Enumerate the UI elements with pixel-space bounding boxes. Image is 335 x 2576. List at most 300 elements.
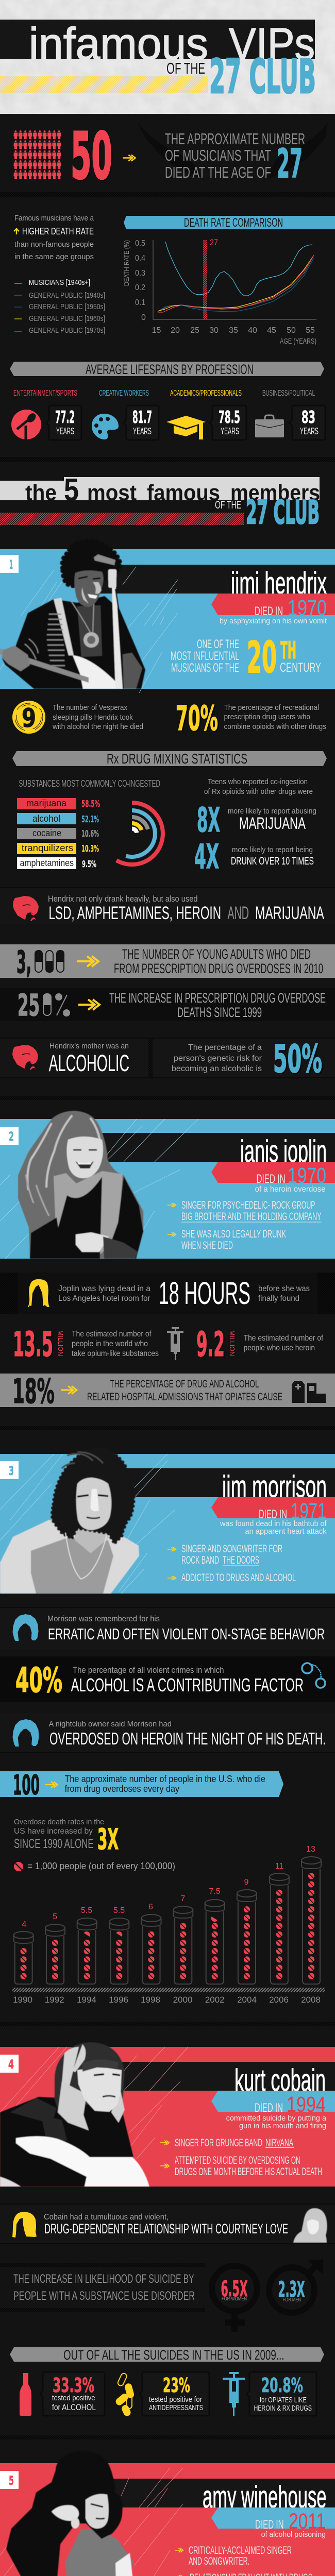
value: antidepressants (140, 2372, 209, 2416)
value labels: 9 (244, 1878, 249, 1887)
value labels: 5.5 (113, 1906, 125, 1915)
joplin eighteen hours panel: 18 HOURS (159, 1276, 250, 1311)
x axis labels: 25 (190, 326, 199, 335)
description (165, 130, 305, 181)
opium and heroin users: The estimated number of (244, 1334, 323, 1343)
photo: jim morrison (0, 1449, 139, 1594)
x axis labels: 55 (306, 326, 315, 335)
substance use disorder stat: THE INCREASE IN LIKELIHOOD OF SUICIDE BY (13, 2272, 194, 2286)
photo: courtney love (293, 2208, 327, 2243)
substance use disorder stat: 6.5X (221, 2276, 247, 2301)
cause of death: by asphyxiating on his own vomit (220, 617, 327, 625)
value: opiates: 20.8% (261, 2374, 303, 2397)
heading words: the (25, 480, 57, 505)
hendrix drug use band (0, 887, 335, 924)
substances bars: 52.1% (81, 814, 99, 825)
hendrix mother panel (0, 1037, 335, 1081)
divider (0, 457, 335, 462)
substances bars: 10.3% (81, 843, 99, 854)
yellow hatch bar (0, 76, 208, 93)
higher death rate note: HIGHER DEATH RATE (22, 226, 94, 236)
overdose increase band: 25 (18, 988, 40, 1023)
year labels: 1992 (45, 1995, 64, 2005)
hendrix mother panel: becoming an alcoholic is (172, 1064, 262, 1073)
higher death rate note: Famous musicians have a (14, 214, 94, 223)
chart legend: GENERAL PUBLIC [1960s] (29, 314, 105, 323)
value: alcohol: tested positive (52, 2394, 95, 2402)
cause of death: of alcohol poisoning (261, 2530, 326, 2539)
y axis labels: 0 (141, 313, 146, 322)
value: men: FOR MEN (282, 2297, 301, 2303)
heading words: famous (147, 480, 220, 505)
50 musicians stat: 50 (71, 119, 112, 194)
arrow (61, 1386, 77, 1394)
category labels (13, 389, 315, 398)
rank badge: 2 (9, 1129, 14, 1144)
title: infamous VIPs (29, 19, 315, 69)
x axis labels: 45 (267, 326, 276, 335)
hospital admissions band: THE PERCENTAGE OF DRUG AND ALCOHOL (110, 1378, 259, 1390)
wings watermark (138, 123, 328, 179)
bottle 1990 (14, 1931, 34, 1984)
arrow (45, 1782, 58, 1788)
x axis labels: 30 (209, 326, 219, 335)
icon: joplin hair (28, 1279, 49, 1307)
divider (0, 1096, 335, 1100)
white torn band (0, 477, 320, 500)
year labels: 1996 (109, 1995, 128, 2005)
icon: cobain hair (12, 2212, 37, 2238)
violent crimes band: The percentage of all violent crimes in which (73, 1665, 224, 1675)
category labels: ENTERTAINMENT/SPORTS (13, 389, 77, 398)
substances bars: alcohol (32, 814, 60, 824)
bar chart: pill bottles (12, 1845, 325, 2005)
chart legend: GENERAL PUBLIC [1970s] (29, 326, 105, 335)
title: infamous VIPs: VIPs (229, 19, 315, 69)
icon: hospital (292, 1381, 326, 1403)
icon: morrison hair (12, 1614, 38, 1643)
divider (0, 192, 335, 197)
line chart: death rate by age: 27 (210, 238, 218, 247)
teens co-ingestion stats: more likely to report being (232, 845, 313, 854)
bullets: WHEN SHE DIED (181, 1240, 233, 1251)
bottle 1998 (141, 1914, 161, 1984)
death year tab: DIED IN (255, 2101, 283, 2115)
divider (0, 2308, 205, 2312)
cobain relationship panel: Cobain had a tumultuous and violent, (44, 2213, 169, 2222)
panel: kurt cobain (0, 2042, 335, 2187)
x axis labels (152, 326, 315, 335)
icon: up arrow (14, 229, 19, 234)
hendrix drug use band: LSD, AMPHETAMINES, HEROIN (48, 903, 221, 923)
value labels: 13 (306, 1845, 315, 1854)
violent crimes band: 40% (15, 1660, 62, 1700)
value: business: 83 (301, 407, 315, 427)
stat: 70 percent: The percentage of recreational (224, 703, 319, 712)
diagonal lines (0, 567, 178, 693)
death year tab (211, 1162, 335, 1188)
morrison overdose panel: A nightclub owner said Morrison had (48, 1720, 172, 1728)
bullets (175, 2545, 314, 2576)
value: alcohol (40, 2372, 105, 2416)
value: antidepressants: tested positive for (149, 2395, 202, 2404)
cause of death: committed suicide by putting a (226, 2114, 327, 2123)
bottle 2006 (270, 1873, 289, 1984)
description: The number of Vesperax (53, 703, 127, 712)
lifespans row (11, 389, 325, 440)
stat: 70 percent: prescription drug users who (224, 713, 310, 721)
icon: capsule percent (43, 994, 70, 1016)
substance use disorder stat (13, 2259, 323, 2332)
value: women (221, 2276, 247, 2302)
diagonal lines (0, 2047, 188, 2159)
pill chart legend: = 1,000 people (out of every 100,000) (27, 1861, 175, 1871)
bottle 1996 (109, 1918, 129, 1984)
icon: hendrix head (12, 1045, 38, 1070)
stat: nine vesperax (12, 701, 143, 734)
20th century: 20 (247, 632, 277, 683)
value: antidepressants: 23% (163, 2374, 190, 2397)
panel: janis joplin (0, 1111, 335, 1259)
value: creative: 81.7 (132, 407, 152, 427)
line chart: death rate by age (122, 238, 316, 346)
y axis labels (135, 239, 146, 322)
death year tab (211, 2507, 335, 2534)
stat: 70 percent: combine opioids with other drugs (224, 722, 326, 731)
death year tab: 2011 (289, 2509, 326, 2534)
photo: kurt cobain (0, 2042, 149, 2187)
value: alcohol: 33.3% (53, 2374, 94, 2397)
joplin eighteen hours panel (0, 1273, 335, 1314)
black name band (98, 565, 335, 594)
y axis labels: 0.5 (135, 239, 145, 248)
red hatch bar (0, 513, 244, 525)
teens co-ingestion stats: 4X (194, 838, 219, 876)
bottle 2008 (301, 1857, 321, 1984)
curves (158, 242, 314, 312)
value: alcohol: for ALCOHOL (52, 2402, 96, 2412)
rank badge (0, 555, 19, 573)
bullets (167, 1199, 322, 1251)
heading words: 5 (64, 472, 79, 508)
divider (0, 2435, 335, 2439)
category labels: ACADEMICS/PROFESSIONALS (170, 389, 242, 398)
heading words (25, 472, 320, 508)
value: entertainment (46, 405, 81, 440)
x axis title: AGE (YEARS) (280, 337, 316, 346)
suicide stats row (20, 2372, 316, 2417)
rank badge (0, 1127, 19, 1145)
chart legend: MUSICIANS [1940s+] (29, 278, 90, 287)
substances bars: cocaine (32, 828, 61, 838)
value labels: 6 (148, 1903, 153, 1911)
hospital admissions band (0, 1372, 335, 1411)
photo: amy winehouse (6, 2451, 136, 2576)
rank badge: 1 (9, 557, 13, 572)
y axis title: DEATH RATE (%) (122, 240, 130, 286)
stat: 70 percent: 70% (176, 699, 218, 738)
description: with alcohol the night he died (52, 722, 143, 731)
divider (0, 2022, 335, 2026)
cause of death: an apparent heart attack (245, 1527, 327, 1536)
hendrix drug use band: Hendrix not only drank heavily, but also used (48, 894, 198, 904)
y axis labels: 0.4 (135, 254, 145, 263)
diagonal lines (0, 1454, 175, 1594)
bottle 2004 (237, 1890, 257, 1984)
of the: OF THE (215, 499, 241, 511)
description: sleeping pills Hendrix took (53, 713, 133, 722)
arrow (123, 155, 136, 161)
people pictogram grid (13, 130, 62, 180)
teens co-ingestion stats: more likely to report abusing (228, 807, 316, 816)
icon: palette (92, 414, 119, 439)
description: DIED AT THE AGE OF (165, 163, 271, 181)
cause of death: gun in his mouth and firing (239, 2122, 326, 2130)
value: antidepressants: ANTIDEPRESSANTS (149, 2403, 203, 2412)
100 per day banner: The approximate number of people in the U.S. who die (65, 1774, 265, 1784)
27 marker (203, 240, 207, 319)
value: men (278, 2277, 305, 2303)
icon: briefcase (255, 415, 284, 437)
young adults overdose band: 3, (16, 944, 31, 980)
teens co-ingestion stats: of Rx opioids with other drugs were (204, 787, 313, 796)
value labels: 5 (53, 1912, 57, 1921)
opium and heroin users: The estimated number of (72, 1330, 152, 1338)
stat: 70 percent (176, 699, 326, 738)
joplin eighteen hours panel: before she was (258, 1284, 310, 1293)
morrison overdose panel (0, 1713, 335, 1753)
substances bars: 10.6% (81, 828, 99, 839)
value: opiates: HEROIN & RX DRUGS (254, 2404, 312, 2413)
violent crimes band (0, 1656, 335, 1702)
x axis labels: 50 (287, 326, 296, 335)
hendrix mother panel: ALCOHOLIC (48, 1050, 129, 1076)
cobain relationship panel (0, 2204, 335, 2244)
value: academics (210, 405, 246, 440)
x axis labels: 20 (171, 326, 180, 335)
substances bars: marijuana (26, 798, 67, 808)
death year tab (211, 2091, 335, 2117)
hendrix mother panel: Hendrix's mother was an (49, 1042, 129, 1050)
opium and heroin users: take opium-like substances (72, 1349, 159, 1358)
death year tab: 1994 (287, 2092, 326, 2117)
value labels: 7.5 (209, 1887, 221, 1896)
year labels (13, 1995, 321, 2005)
year labels: 1990 (13, 1995, 32, 2005)
influence text: MOST INFLUENTIAL (171, 649, 239, 663)
50 musicians stat: 27 (277, 141, 303, 187)
heading words: most (87, 480, 137, 505)
opium and heroin users: MILLION (57, 1330, 64, 1356)
rx drug mixing banner: Rx DRUG MIXING STATISTICS (107, 751, 247, 767)
panel: jimi hendrix (0, 541, 335, 693)
hospital admissions band: 18% (12, 1372, 55, 1411)
icon: number nine badge (12, 701, 45, 734)
bottle 2000 (173, 1906, 193, 1984)
diagonal lines (0, 2468, 183, 2576)
bullets: NIRVANA (265, 2137, 293, 2149)
rank badge: 5 (9, 2473, 14, 2488)
rank badge (0, 2471, 19, 2489)
value: academics: 78.5 (219, 407, 240, 427)
overdose rate statement: 3X (97, 1823, 119, 1856)
influence text (171, 637, 239, 675)
substances bars: amphetamines (20, 858, 74, 868)
100 per day banner (0, 1770, 283, 1801)
teens co-ingestion stats: Teens who reported co-ingestion (208, 777, 308, 786)
overdose increase band: DEATHS SINCE 1999 (177, 1005, 262, 1020)
rank badge (0, 2055, 19, 2073)
diagonal lines (0, 1119, 198, 1259)
death year tab: DIED IN (255, 2518, 284, 2532)
morrison behavior panel: Morrison was remembered for his (47, 1615, 160, 1623)
panel: jim morrison (0, 1449, 335, 1594)
chart legend: GENERAL PUBLIC [1950s] (29, 302, 105, 311)
year labels: 1994 (77, 1995, 96, 2005)
50 musicians stat (13, 119, 328, 194)
opium and heroin users: 13.5 (13, 1325, 53, 1364)
value: opiates (247, 2372, 316, 2416)
value: creative (124, 405, 159, 440)
arrow (77, 956, 98, 967)
y axis labels: 0.1 (135, 298, 145, 307)
y axis labels: 0.3 (135, 269, 145, 278)
value: business (290, 405, 325, 440)
young adults overdose band (0, 944, 335, 980)
bottle 2002 (205, 1900, 225, 1984)
radial chart (116, 803, 163, 865)
higher death rate note: than non-famous people (14, 240, 94, 249)
value: business: YEARS (300, 426, 319, 436)
icons: capsule zeros (35, 951, 64, 972)
influence text: MUSICIANS OF THE (171, 661, 239, 675)
y axis labels: 0.2 (135, 283, 145, 292)
bullets (167, 1543, 296, 1584)
opium and heroin users: people in the world who (72, 1340, 148, 1348)
bullets: AND SONGWRITER. (189, 2555, 249, 2567)
subtitle: of the: OF THE (166, 59, 205, 77)
panel: amy winehouse (0, 2451, 335, 2576)
icon: handcuffs (302, 1663, 325, 1688)
bullets (160, 2137, 322, 2178)
black name band (113, 1468, 335, 1497)
joplin eighteen hours panel: Los Angeles hotel room for (58, 1294, 150, 1303)
section heading: five most famous members (0, 472, 320, 531)
joplin eighteen hours panel: Joplin was lying dead in a (58, 1284, 150, 1293)
value labels: 5.5 (81, 1906, 92, 1915)
icon: syringe (167, 1327, 183, 1360)
higher death rate note (14, 214, 94, 261)
death year tab (211, 594, 335, 620)
value: academics: YEARS (221, 426, 239, 436)
rank badge (0, 1461, 19, 1479)
opium and heroin users: MILLION (228, 1330, 236, 1356)
black name band (119, 2062, 335, 2091)
cause of death (220, 1519, 327, 1536)
chart legend (14, 278, 105, 335)
hendrix mother panel: person's genetic risk for (174, 1054, 262, 1063)
death year tab: DIED IN (259, 1507, 287, 1521)
value labels: 11 (275, 1862, 283, 1871)
opium and heroin users (13, 1325, 323, 1364)
bottle 1994 (77, 1918, 97, 1984)
title header (0, 0, 335, 114)
substances bars (17, 798, 100, 870)
overdose rate statement: Overdose death rates in the (14, 1818, 104, 1826)
20th century: TH (280, 636, 296, 664)
cause of death: was found dead in his bathtub of (220, 1519, 327, 1528)
description (52, 703, 143, 731)
opium and heroin users: 9.2 (196, 1325, 225, 1364)
death year tab (211, 1497, 335, 1523)
icon: syringe (223, 2372, 245, 2416)
value: women: FOR WOMEN (222, 2296, 247, 2302)
cause of death (226, 2114, 327, 2130)
value labels: 4 (22, 1920, 26, 1929)
icon: graduation cap (166, 416, 206, 439)
icon: morrison hair (13, 1719, 39, 1749)
value: entertainment: 77.2 (55, 407, 75, 427)
rank badge: 4 (8, 2057, 14, 2072)
bullets: SINGER FOR GRUNGE BAND (175, 2137, 262, 2149)
teens co-ingestion stats: MARIJUANA (239, 814, 306, 833)
icon: microphone (11, 410, 41, 439)
photo: jimi hendrix (0, 541, 145, 689)
year labels: 2006 (269, 1995, 289, 2005)
opium and heroin users: people who use heroin (244, 1344, 315, 1352)
photo: janis joplin (18, 1111, 143, 1259)
value labels: 7 (181, 1894, 186, 1903)
divider (0, 1426, 335, 1430)
joplin eighteen hours panel: finally found (258, 1294, 299, 1303)
arrow (78, 999, 99, 1010)
year labels: 1998 (141, 1995, 160, 2005)
teens co-ingestion stats: 8X (197, 801, 220, 840)
title band (0, 20, 315, 59)
substances bars: 9.5% (82, 859, 96, 870)
substances bars: tranquilizers (22, 843, 73, 853)
ground hatch (12, 1988, 325, 1992)
heading words: members (230, 480, 320, 505)
rank badge: 3 (9, 1464, 14, 1478)
substance use disorder stat: 2.3X (278, 2277, 305, 2302)
value: opiates: for OPIATES LIKE (260, 2396, 307, 2404)
death year tab: DIED IN (255, 604, 283, 618)
cause of death: of a heroin overdose (255, 1185, 326, 1194)
category labels: CREATIVE WORKERS (99, 389, 149, 398)
substance use disorder stat: PEOPLE WITH A SUBSTANCE USE DISORDER (13, 2289, 195, 2303)
value: entertainment: YEARS (56, 426, 74, 436)
overdose rate statement (14, 1818, 119, 1856)
rx drug mixing banner (12, 751, 327, 767)
x axis labels: 35 (229, 326, 238, 335)
substances bars: 58.5% (81, 799, 100, 809)
x axis labels: 15 (152, 326, 161, 335)
100 per day banner: 100 (13, 1770, 40, 1801)
hendrix drug use band: AND (228, 903, 249, 923)
bullets: ROCK BAND (181, 1554, 219, 1566)
icon: number nine badge: 9 (22, 703, 36, 733)
icon: pills (114, 2372, 135, 2417)
value: creative: YEARS (133, 426, 152, 436)
death year tab: DIED IN (257, 1172, 286, 1186)
year labels: 2004 (237, 1995, 257, 2005)
icon: female symbol (212, 2266, 257, 2332)
icon: hendrix head (13, 896, 39, 921)
overdose increase band (0, 988, 335, 1023)
influence text: ONE OF THE (197, 637, 239, 651)
100 per day banner: from drug overdoses every day (65, 1784, 179, 1794)
